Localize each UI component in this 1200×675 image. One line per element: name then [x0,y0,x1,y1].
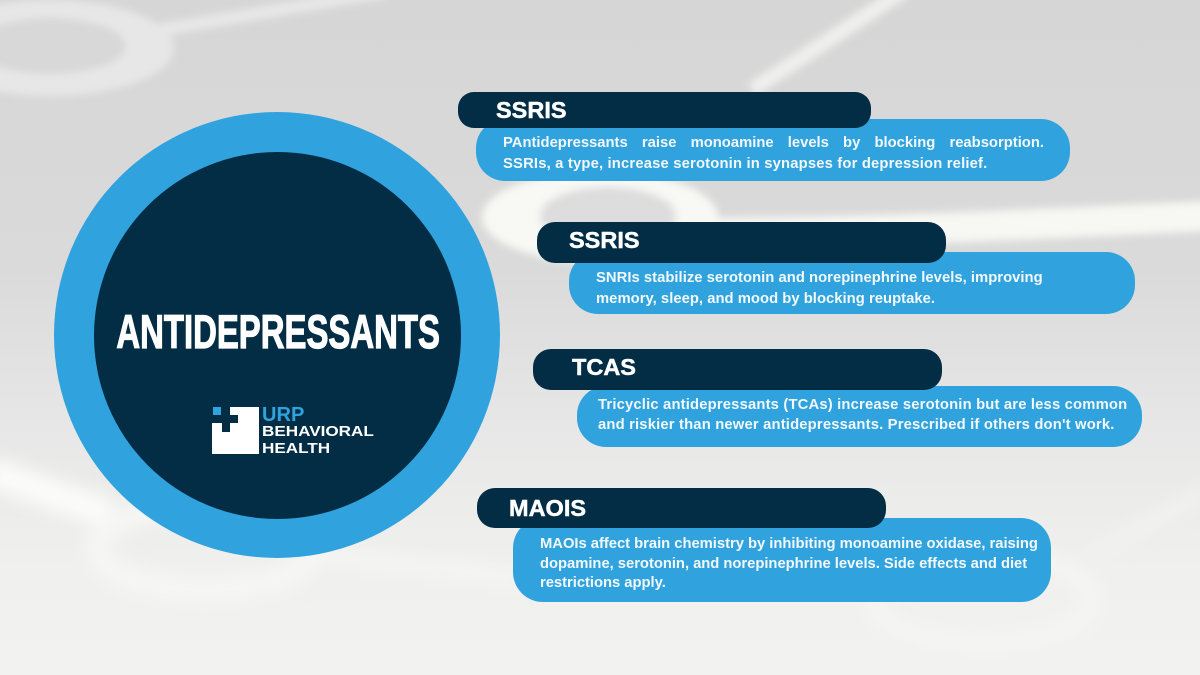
body pill [513,518,1051,602]
panel: MAOIs description [477,488,1051,602]
description text: SSRIs, a type, increase serotonin in synapses for depression relief. [503,156,987,172]
logo text [262,404,374,456]
heading bar [533,349,942,390]
description text: MAOIs affect brain chemistry by inhibiting monoamine oxidase, raising [540,536,1038,552]
logo text: BEHAVIORAL [262,424,374,440]
heading bar [477,488,886,528]
panel: TCAs description [533,349,1142,447]
logo text: HEALTH [262,440,330,456]
description text: restrictions apply. [540,575,666,591]
heading bar: SSRIS [496,97,567,123]
body pill [569,252,1135,314]
description text: PAntidepressants raise monoamine levels by blocking reabsorption. [503,135,1044,151]
description text: Tricyclic antidepressants (TCAs) increase serotonin but are less common [598,397,1127,413]
heading bar [458,92,871,128]
panel: SNRIs description [537,222,1135,314]
panel: SSRIs description [458,92,1070,181]
logo: URP Behavioral Health [212,404,374,456]
title: ANTIDEPRESSANTS [116,305,440,358]
description text [596,270,1043,306]
body pill [577,386,1142,447]
body pill [476,119,1070,181]
central circle: antidepressants [54,112,500,558]
description text: dopamine, serotonin, and norepinephrine levels. Side effects and diet [540,556,1027,572]
description text [540,536,1038,591]
icon: logo cross mark [212,407,259,454]
description text [598,397,1127,433]
heading bar [537,222,946,263]
description text: and riskier than newer antidepressants. Prescribed if others don't work. [598,417,1115,433]
heading bar: SSRIS [569,227,640,253]
logo text: URP [262,404,304,426]
inner dark circle [94,152,461,519]
description text [503,135,1044,172]
description text: SNRIs stabilize serotonin and norepinephrine levels, improving [596,270,1043,286]
description text: memory, sleep, and mood by blocking reuptake. [596,290,935,306]
heading bar: MAOIS [509,495,586,521]
heading bar: TCAS [572,354,636,380]
